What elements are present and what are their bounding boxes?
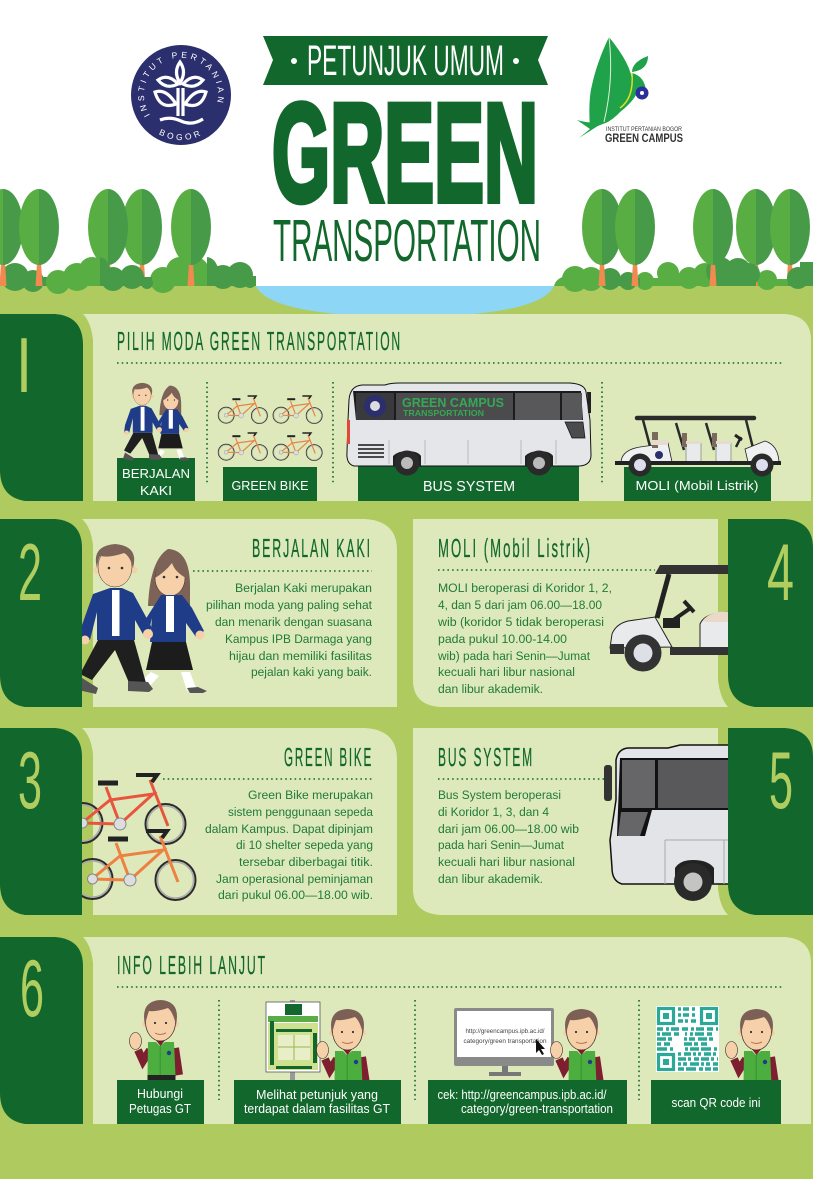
- panel 1: pilih moda: [83, 314, 811, 501]
- icon: officer beside board: [316, 1009, 366, 1089]
- body text: di Koridor 1, 3, dan 4: [438, 805, 549, 819]
- body text: kecuali hari libur nasional: [438, 855, 575, 869]
- body text: Green Bike merupakan: [248, 788, 373, 802]
- body text: Berjalan Kaki merupakan: [235, 581, 372, 595]
- label: url: category/green-transportation: [461, 1101, 613, 1116]
- body text: pejalan kaki yang baik.: [251, 665, 372, 679]
- label box: berjalan kaki: [117, 458, 195, 501]
- label box: bus system: [358, 465, 579, 501]
- tab 5: [728, 728, 813, 915]
- body text: tersebar diberbagai titik.: [239, 855, 373, 869]
- body text: Jam operasional peminjaman: [216, 872, 373, 886]
- label box: berjalan kaki: KAKI: [140, 483, 172, 498]
- body text: di 10 shelter sepeda yang: [236, 838, 373, 852]
- title: green: GREEN: [272, 74, 538, 231]
- icon: information board: [266, 1000, 320, 1080]
- icon: monitor with url: category/green transportation: [464, 1038, 547, 1045]
- tab 1: [0, 314, 83, 501]
- tab 5: 5: [769, 736, 793, 826]
- body text: hijau dan memiliki fasilitas: [229, 649, 372, 663]
- body text: pilihan moda yang paling sehat: [206, 598, 373, 612]
- label: url: [428, 1080, 627, 1124]
- title: banner petunjuk umum: [263, 36, 548, 85]
- logo: IPB Green Campus: [577, 37, 683, 145]
- label box: green bike: GREEN BIKE: [232, 478, 309, 493]
- label: scan qr: scan QR code ini: [672, 1095, 761, 1110]
- label box: moli: [624, 467, 771, 501]
- icon: officer beside monitor: [550, 1009, 600, 1089]
- label: hubungi: Hubungi: [137, 1086, 183, 1101]
- left tree line and bushes: [0, 189, 256, 294]
- panel 5: bus system: [413, 728, 730, 915]
- logo: Institut Pertanian Bogor seal: BOGOR: [159, 129, 200, 140]
- tab 2: [0, 519, 82, 707]
- label: melihat petunjuk: terdapat dalam fasilitas GT: [244, 1101, 390, 1116]
- label: hubungi: Petugas GT: [129, 1101, 191, 1116]
- icon: bus: [347, 383, 591, 476]
- body text: dan libur akademik.: [438, 872, 543, 886]
- title: transportation: TRANSPORTATION: [273, 208, 541, 274]
- body text: 4, dan 5 dari jam 06.00—18.00: [438, 598, 602, 612]
- label: melihat petunjuk: [234, 1080, 401, 1124]
- body text: MOLI beroperasi di Koridor 1, 2,: [438, 581, 612, 595]
- body text: Bus System beroperasi: [438, 788, 561, 802]
- body text: dari jam 06.00—18.00 wib: [438, 822, 579, 836]
- tab 1: I: [16, 321, 32, 409]
- tab 3: 3: [18, 736, 42, 826]
- panel 3: green bike: [62, 728, 397, 915]
- tab 2: 2: [18, 528, 42, 618]
- body text: kecuali hari libur nasional: [438, 665, 575, 679]
- icon: bus: TRANSPORTATION: [403, 408, 484, 418]
- icon: four green bikes: [218, 396, 322, 461]
- body text: dalam Kampus. Dapat dipinjam: [205, 822, 373, 836]
- ground: [0, 286, 813, 1179]
- body text: [206, 581, 373, 679]
- illustration: students: [78, 544, 207, 694]
- icon: bus: GREEN CAMPUS: [402, 395, 504, 410]
- icon: monitor with url: http://greencampus.ipb.ac.id/: [466, 1028, 545, 1035]
- logo: Institut Pertanian Bogor seal: [131, 45, 231, 145]
- logo: Institut Pertanian Bogor seal: INSTITUT PERTANIAN: [138, 52, 224, 118]
- label box: bus system: BUS SYSTEM: [423, 478, 515, 495]
- panel 1: pilih moda: PILIH MODA GREEN TRANSPORTATION: [117, 326, 402, 356]
- panel 3: green bike: GREEN BIKE: [284, 742, 373, 772]
- icon: officer waving: [130, 1000, 179, 1080]
- right tree line and bushes: [554, 189, 813, 292]
- logo: IPB Green Campus: INSTITUT PERTANIAN BOGOR: [606, 127, 683, 133]
- illustration: bus front: [604, 745, 730, 901]
- illustration: red bike: [62, 775, 186, 844]
- body text: pada hari Senin—Jumat: [438, 838, 565, 852]
- tab 3: [0, 728, 82, 915]
- body text: [438, 788, 579, 886]
- panel 2: berjalan kaki: BERJALAN KAKI: [252, 533, 372, 563]
- pond: [256, 286, 554, 317]
- illustration: moli cart: [610, 565, 730, 672]
- panel 6: info lebih lanjut: INFO LEBIH LANJUT: [117, 950, 267, 980]
- body text: wib (koridor 5 tidak beroperasi: [437, 615, 604, 629]
- body text: pada pukul 10.00-14.00: [438, 632, 567, 646]
- tab 4: 4: [767, 528, 794, 618]
- logo: IPB Green Campus: GREEN CAMPUS: [605, 131, 683, 145]
- body text: dan libur akademik.: [438, 682, 543, 696]
- label box: green bike: [223, 467, 317, 501]
- icon: students walking: [123, 383, 190, 461]
- label: scan qr: [651, 1080, 781, 1124]
- icon: qr code: [656, 1006, 719, 1072]
- body text: sistem penggunaan sepeda: [228, 805, 373, 819]
- body text: [437, 581, 612, 696]
- panel 6: info lebih lanjut: [83, 937, 811, 1124]
- illustration: orange bike: [72, 831, 196, 900]
- tab 4: [728, 519, 813, 707]
- label: melihat petunjuk: Melihat petunjuk yang: [256, 1087, 378, 1102]
- tab 6: [0, 937, 83, 1124]
- icon: officer beside qr: [726, 1009, 775, 1089]
- label box: berjalan kaki: BERJALAN: [122, 466, 190, 481]
- icon: moli electric cart: [615, 418, 781, 476]
- heading: MOLI (Mobil Listrik): [438, 533, 592, 563]
- body text: [205, 788, 373, 902]
- body text: dari pukul 06.00—18.00 wib.: [218, 888, 373, 902]
- body text: wib) pada hari Senin—Jumat: [437, 649, 591, 663]
- label: url: cek: http://greencampus.ipb.ac.id/: [438, 1087, 607, 1102]
- label: hubungi: [117, 1080, 204, 1124]
- panel 2: berjalan kaki: [78, 519, 397, 707]
- icon: monitor with url: [454, 1008, 554, 1076]
- tab 6: 6: [20, 944, 44, 1034]
- label box: moli: MOLI (Mobil Listrik): [636, 478, 758, 493]
- body text: dan menarik dengan suasana: [215, 615, 372, 629]
- panel 4: moli: [413, 519, 730, 707]
- title: banner petunjuk umum: PETUNJUK UMUM: [307, 37, 504, 85]
- panel 5: bus system: BUS SYSTEM: [438, 742, 534, 772]
- body text: Kampus IPB Darmaga yang: [225, 632, 372, 646]
